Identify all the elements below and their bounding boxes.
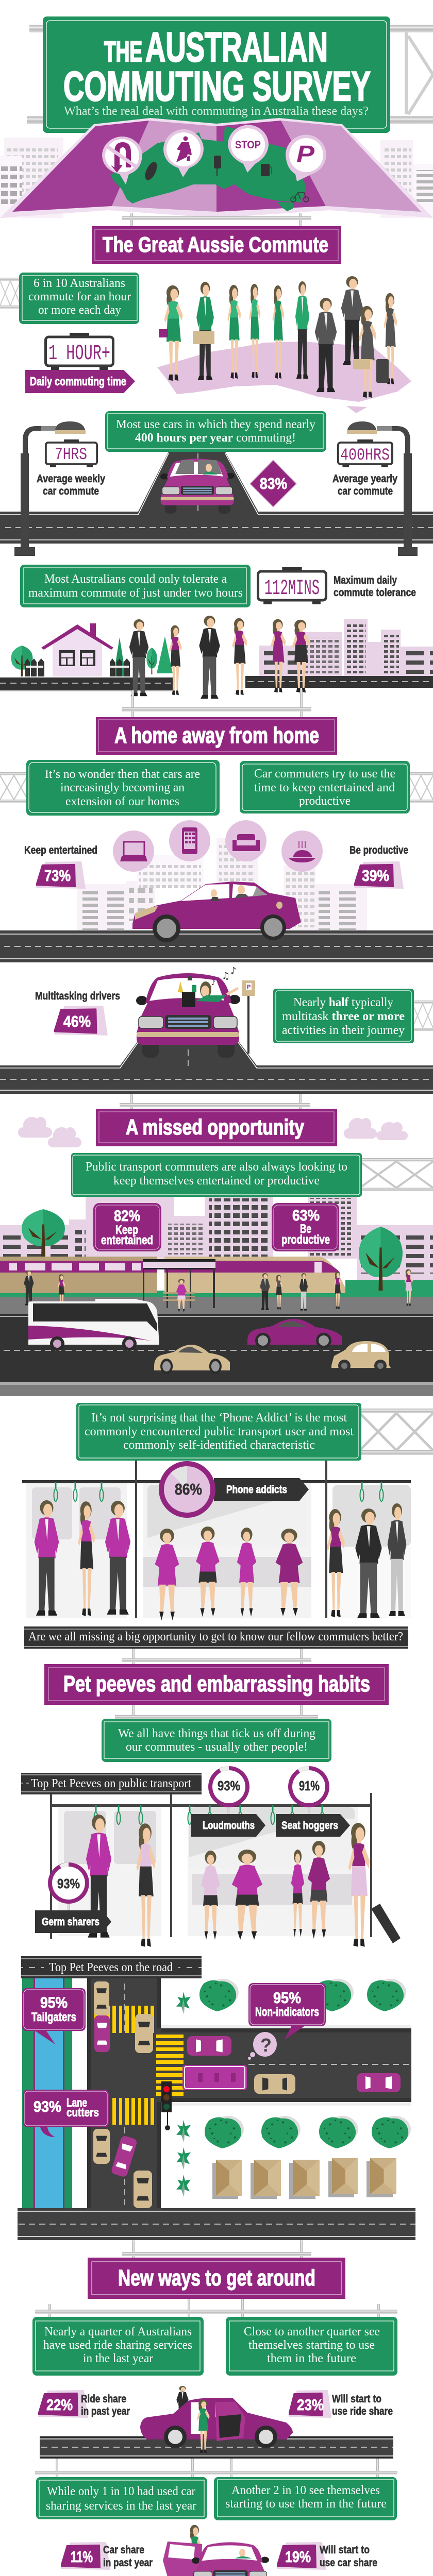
heading: Pet peeves and embarrassing habits bbox=[44, 1649, 389, 1705]
stat: seat hoggers: Seat hoggers bbox=[281, 1820, 338, 1832]
label: will start to use ride share: use ride share bbox=[332, 2405, 393, 2417]
bus from above bbox=[182, 2065, 247, 2090]
clock: 7 hrs bbox=[46, 439, 97, 467]
commuters showing pet peeves bbox=[86, 1815, 370, 1947]
stat: germ sharers: Germ sharers bbox=[42, 1916, 99, 1928]
support pipes bbox=[35, 2299, 397, 2318]
sign: 63% be productive: Be bbox=[300, 1222, 311, 1236]
label: average yearly: Average yearly bbox=[332, 473, 397, 485]
diamond: 83%: 83% bbox=[260, 474, 287, 493]
trees and fence bbox=[11, 636, 173, 676]
text box: multitask: Nearly half typically bbox=[293, 996, 393, 1009]
label: will start to use ride share: Will start to bbox=[332, 2393, 381, 2405]
arrow: phone addicts: Phone addicts bbox=[226, 1484, 287, 1496]
music notes: ♫ bbox=[222, 971, 230, 981]
support pipes bbox=[35, 2459, 397, 2477]
ride share car with passengers bbox=[140, 2386, 293, 2453]
sedan wheels bbox=[153, 914, 286, 942]
heading: New ways to get around: New ways to get around bbox=[118, 2265, 315, 2291]
text box: things that tick us off: our commutes - usually other people! bbox=[126, 1740, 308, 1754]
heading: A home away from home: A home away from home bbox=[114, 723, 319, 748]
crosswalks bbox=[94, 2006, 184, 2125]
title: THE bbox=[104, 35, 142, 67]
speech bubble: tailgaters bbox=[22, 1988, 86, 2044]
clock: 1 hour bbox=[45, 333, 113, 370]
text box: tolerance bbox=[20, 565, 251, 607]
sign: 63% be productive: 63% bbox=[292, 1207, 320, 1224]
label: ride share: in past year bbox=[81, 2405, 130, 2417]
badge: 46% bbox=[54, 1006, 108, 1036]
lamp post right bbox=[347, 421, 418, 556]
city and station scene bbox=[0, 1197, 433, 1396]
label: maximum daily bbox=[334, 574, 416, 599]
title bbox=[63, 24, 371, 110]
speech bubble: tailgaters: Tailgaters bbox=[31, 2010, 76, 2024]
text box: ride sharing used: in the last year bbox=[83, 2352, 153, 2365]
bus bbox=[28, 1299, 159, 1351]
train carriage interior: pet peeves bbox=[50, 1793, 401, 1947]
road bbox=[0, 1314, 433, 1396]
text box: things that tick us off bbox=[102, 1719, 331, 1762]
badge: 46%: 46% bbox=[63, 1012, 91, 1030]
speech bubble: lane cutters bbox=[23, 2090, 109, 2137]
label: keep entertained: Keep entertained bbox=[24, 844, 97, 856]
text box: 400 hours: Most use cars in which they spend nearly bbox=[116, 418, 315, 431]
standing and seated commuters bbox=[35, 1500, 406, 1620]
text box: phone addict: commonly self-identified characteristic bbox=[123, 1438, 315, 1452]
handbag and briefcase bbox=[159, 329, 389, 383]
map of Australia bbox=[110, 126, 306, 211]
badge: 11% bbox=[61, 2542, 110, 2570]
icon: bowl of food bbox=[281, 831, 323, 872]
stat: loudmouths: Loudmouths bbox=[203, 1820, 255, 1832]
text box: entertained and productive bbox=[240, 761, 410, 814]
label: will start to use car share: Will start to bbox=[320, 2544, 370, 2556]
hanging straps bbox=[54, 1482, 384, 1501]
banner: get to know fellow commuters: Are we all missing a big opportunity to get to know our fellow commuters better? bbox=[28, 1630, 403, 1643]
support pipes and truss bbox=[27, 25, 433, 124]
badge: 73% bbox=[36, 861, 86, 889]
folded map bbox=[0, 118, 433, 218]
pie: 86%: 86% bbox=[175, 1480, 202, 1498]
aerial road map bbox=[18, 1978, 415, 2240]
plants bbox=[176, 1992, 191, 2197]
roads bbox=[0, 676, 433, 691]
text box: car sharing used: While only 1 in 10 had used car bbox=[47, 2485, 195, 2498]
sign: 82% keep entertained: 82% bbox=[114, 1208, 140, 1225]
text box: phone addict: commonly encountered public transport user and most bbox=[85, 1425, 354, 1438]
support pipes bbox=[115, 1705, 318, 1719]
title: AUSTRALIAN bbox=[145, 24, 328, 71]
label: average weekly: car commute bbox=[43, 485, 99, 497]
car share vehicle with woman bbox=[163, 2525, 269, 2576]
train carriage interior: phone addicts bbox=[22, 1458, 411, 1620]
label: maximum daily: Maximum daily bbox=[334, 574, 397, 586]
label: will start to use car share: use car share bbox=[320, 2557, 377, 2569]
label: average weekly bbox=[37, 473, 105, 497]
badge: 22% bbox=[38, 2390, 88, 2418]
icon: traffic light bbox=[214, 156, 221, 176]
text box: ride sharing future: themselves starting to use bbox=[248, 2338, 375, 2352]
text box: ride sharing used: Nearly a quarter of Australians bbox=[44, 2325, 192, 2338]
music notes: ♪ bbox=[230, 965, 236, 976]
text box: 6 in 10: or more each day bbox=[38, 303, 121, 317]
text box: 400 hours: 400 hours per year commuting! bbox=[135, 431, 296, 445]
text box: tolerance: Most Australians could only tolerate a bbox=[44, 572, 227, 586]
text box: extension of homes: extension of our homes bbox=[65, 795, 179, 808]
sign: 82% keep entertained bbox=[93, 1203, 161, 1251]
truss: right bbox=[412, 1001, 433, 1031]
label: average yearly bbox=[332, 473, 397, 497]
background city left bbox=[0, 138, 63, 218]
music notes bbox=[211, 965, 236, 987]
river bbox=[22, 1978, 72, 2208]
people bbox=[164, 276, 397, 398]
road bbox=[0, 930, 433, 962]
speech bubble: lane cutters: cutters bbox=[66, 2106, 99, 2119]
horizontal road bbox=[157, 2025, 411, 2106]
road with perspective lane bbox=[0, 1041, 433, 1094]
sign: 63% be productive: productive bbox=[281, 1233, 330, 1247]
driver and shopping bbox=[178, 976, 238, 1007]
text box: ride sharing future: Close to another quarter see bbox=[244, 2325, 380, 2338]
label: car share: in past year bbox=[103, 2557, 153, 2569]
buildings bbox=[0, 1197, 433, 1282]
badge: 39% bbox=[354, 861, 404, 889]
commuters on map bbox=[157, 276, 411, 413]
pin: parking bbox=[286, 135, 326, 181]
text box: ride sharing future bbox=[226, 2317, 397, 2376]
arrow: phone addicts bbox=[214, 1478, 309, 1501]
car front with driver bbox=[160, 459, 235, 514]
label: will start to use car share bbox=[320, 2544, 377, 2569]
icon: smartphone bbox=[169, 820, 210, 861]
pin: pedestrian bbox=[163, 129, 204, 177]
badge: 23% bbox=[289, 2390, 331, 2418]
clouds bbox=[18, 1117, 408, 1147]
stat: seat hoggers bbox=[276, 1766, 350, 1837]
clock: 112 mins: 112MINS bbox=[264, 576, 320, 601]
label: be productive: Be productive bbox=[349, 844, 408, 856]
clock: 1 hour: 1 HOUR+ bbox=[48, 341, 110, 366]
badge: 73%: 73% bbox=[44, 867, 71, 885]
speech bubble: lane cutters: Lane bbox=[66, 2096, 87, 2109]
text box: extension of homes: It’s no wonder then that cars are bbox=[45, 768, 200, 781]
hanging straps bbox=[94, 1805, 324, 1824]
label: will start to use ride share bbox=[332, 2393, 393, 2417]
sign: 63% be productive bbox=[272, 1203, 339, 1251]
green title sign bbox=[43, 16, 390, 133]
platform bbox=[0, 1297, 433, 1314]
label: car share bbox=[103, 2544, 153, 2569]
pin: no u-turn bbox=[102, 137, 142, 184]
stat: germ sharers bbox=[35, 1862, 111, 1933]
pie: 86% bbox=[159, 1461, 215, 1518]
banner: public transport bbox=[21, 1773, 202, 1794]
pin: stop: STOP bbox=[235, 139, 261, 151]
text box: car sharing future: starting to use them in the future bbox=[225, 2497, 387, 2511]
text box: public transport: keep themselves entertained or productive bbox=[113, 1174, 320, 1188]
clock: 7 hrs: 7HRS bbox=[55, 445, 87, 464]
badge: 19%: 19% bbox=[285, 2549, 311, 2566]
diamond: 83% bbox=[250, 460, 296, 507]
icon: laptop bbox=[113, 831, 154, 872]
banner: road bbox=[21, 1956, 202, 1978]
icon: fuel pump bbox=[261, 164, 272, 176]
text box: entertained and productive: productive bbox=[299, 794, 351, 808]
badge: 22%: 22% bbox=[46, 2397, 73, 2414]
heading: The Great Aussie Commute bbox=[92, 213, 341, 264]
speech bubble: non-indicators: 95% bbox=[273, 1990, 301, 2007]
truss: right bbox=[360, 1409, 433, 1455]
label: car share: Car share bbox=[103, 2544, 144, 2556]
stat: germ sharers: 93% bbox=[57, 1876, 80, 1891]
music notes: ♪ bbox=[211, 979, 215, 987]
train bbox=[0, 1257, 433, 1297]
banner: road: Top Pet Peeves on the road bbox=[49, 1961, 173, 1974]
label: multitasking drivers: Multitasking drivers bbox=[35, 990, 120, 1002]
text box: 6 in 10 bbox=[19, 273, 139, 324]
text box: ride sharing future: them in the future bbox=[267, 2352, 356, 2365]
text box: things that tick us off: We all have things that tick us off during bbox=[118, 1727, 315, 1740]
label: maximum daily: commute tolerance bbox=[334, 587, 416, 599]
text box: car sharing used bbox=[36, 2477, 207, 2519]
text box: tolerance: maximum commute of just under two hours bbox=[28, 586, 243, 600]
truss: left of first box bbox=[0, 278, 21, 309]
heading: A missed opportunity bbox=[96, 1094, 337, 1146]
label: ride share bbox=[81, 2393, 130, 2417]
subtitle: What’s the real deal with commuting in Australia these days? bbox=[64, 105, 369, 118]
text box: 6 in 10: commute for an hour bbox=[28, 290, 131, 303]
speech bubble: lane cutters: 93% bbox=[34, 2098, 61, 2115]
label: ride share: Ride share bbox=[81, 2393, 126, 2405]
city skyline bbox=[259, 619, 433, 676]
text box: car sharing future bbox=[214, 2477, 397, 2520]
text box: extension of homes bbox=[26, 760, 220, 816]
cars from above bbox=[93, 1981, 401, 2208]
clock: 400 hrs bbox=[338, 439, 392, 467]
road with perspective lane bbox=[0, 452, 433, 544]
lamp post left bbox=[14, 421, 86, 556]
purple sports car bbox=[247, 1319, 342, 1348]
bus shelter bbox=[143, 1259, 215, 1308]
tan sports car bbox=[154, 1345, 230, 1374]
truss: right bbox=[360, 1158, 433, 1191]
speech bubble: non-indicators bbox=[248, 1983, 326, 2040]
bushes bbox=[199, 1979, 411, 2148]
heading: New ways to get around bbox=[88, 2240, 345, 2299]
clock: 112 mins bbox=[258, 567, 326, 604]
commuters between home and city bbox=[129, 616, 310, 699]
badge: 19% bbox=[277, 2542, 326, 2570]
heading: The Great Aussie Commute: The Great Aussie Commute bbox=[103, 232, 328, 257]
heading: A home away from home bbox=[96, 690, 337, 755]
stat: loudmouths bbox=[191, 1766, 265, 1837]
background city bbox=[77, 838, 367, 930]
label: average yearly: car commute bbox=[338, 485, 393, 497]
house bbox=[41, 623, 113, 676]
text box: multitask bbox=[273, 989, 414, 1043]
icon: armchair bbox=[225, 820, 267, 861]
background city right bbox=[380, 140, 433, 218]
house roofs bbox=[212, 2158, 396, 2199]
text box: multitask: activities in their journey bbox=[282, 1024, 405, 1037]
icon: bicycle bbox=[291, 193, 309, 202]
label: average weekly: Average weekly bbox=[37, 473, 105, 485]
text box: 6 in 10: 6 in 10 Australians bbox=[34, 277, 125, 290]
small tan car bbox=[331, 1341, 391, 1372]
sign: 82% keep entertained: entertained bbox=[101, 1233, 153, 1247]
thought bubble: question mark: ? bbox=[260, 2035, 272, 2056]
stat: loudmouths: 93% bbox=[218, 1778, 240, 1793]
parking sign: P bbox=[247, 984, 251, 990]
tree right bbox=[359, 1227, 403, 1292]
parking sign bbox=[242, 980, 255, 1054]
badge: 39%: 39% bbox=[362, 867, 389, 885]
text box: ride sharing used: have used ride sharing services bbox=[43, 2338, 192, 2352]
text box: public transport: Public transport commuters are also always looking to bbox=[86, 1160, 347, 1174]
banner: get to know fellow commuters bbox=[24, 1626, 408, 1649]
text box: extension of homes: increasingly becoming an bbox=[60, 781, 185, 794]
thought bubble: question mark bbox=[248, 2032, 277, 2060]
traffic light bbox=[161, 2081, 172, 2130]
speech bubble: tailgaters: 95% bbox=[40, 1994, 68, 2011]
arrow: daily commuting time: Daily commuting time bbox=[30, 375, 126, 388]
text box: entertained and productive: time to keep entertained and bbox=[254, 781, 395, 794]
truss: left bbox=[0, 772, 28, 803]
banner: public transport: Top Pet Peeves on public transport bbox=[31, 1777, 191, 1790]
text box: phone addict: It’s not surprising that the ‘Phone Addict’ is the most bbox=[91, 1411, 347, 1425]
icon: car bbox=[143, 160, 159, 182]
road bbox=[40, 2436, 393, 2459]
text box: car sharing future: Another 2 in 10 see themselves bbox=[231, 2484, 380, 2497]
tree left bbox=[22, 1209, 65, 1257]
pin: stop bbox=[228, 125, 269, 173]
text box: entertained and productive: Car commuters try to use the bbox=[254, 767, 395, 781]
waiting commuters bbox=[24, 1269, 413, 1312]
pin: parking: P bbox=[296, 141, 314, 167]
sedan with passengers bbox=[132, 882, 301, 929]
header billboard bbox=[0, 16, 433, 218]
text box: 400 hours bbox=[105, 411, 326, 452]
text box: ride sharing used bbox=[32, 2317, 204, 2376]
badge: 11%: 11% bbox=[71, 2549, 93, 2566]
vertical road bbox=[87, 1978, 161, 2208]
speech bubble: non-indicators: Non-indicators bbox=[255, 2005, 319, 2019]
text box: car sharing used: sharing services in the last year bbox=[46, 2499, 196, 2513]
heading: A missed opportunity: A missed opportunity bbox=[126, 1115, 305, 1139]
text box: public transport bbox=[71, 1153, 362, 1197]
text box: phone addict bbox=[76, 1403, 361, 1461]
suitcase bbox=[371, 1904, 401, 1943]
text box: multitask: multitask three or more bbox=[282, 1010, 405, 1023]
truss: right bbox=[409, 772, 433, 803]
car front with multitasking driver bbox=[136, 973, 240, 1058]
sign: 82% keep entertained: Keep bbox=[115, 1223, 138, 1237]
road bbox=[18, 2208, 415, 2240]
stat: seat hoggers: 91% bbox=[299, 1778, 320, 1793]
badge: 23%: 23% bbox=[297, 2397, 324, 2414]
arrow: daily commuting time bbox=[25, 370, 135, 393]
green verge bbox=[345, 1280, 433, 1297]
clock: 400 hrs: 400HRS bbox=[340, 446, 390, 465]
